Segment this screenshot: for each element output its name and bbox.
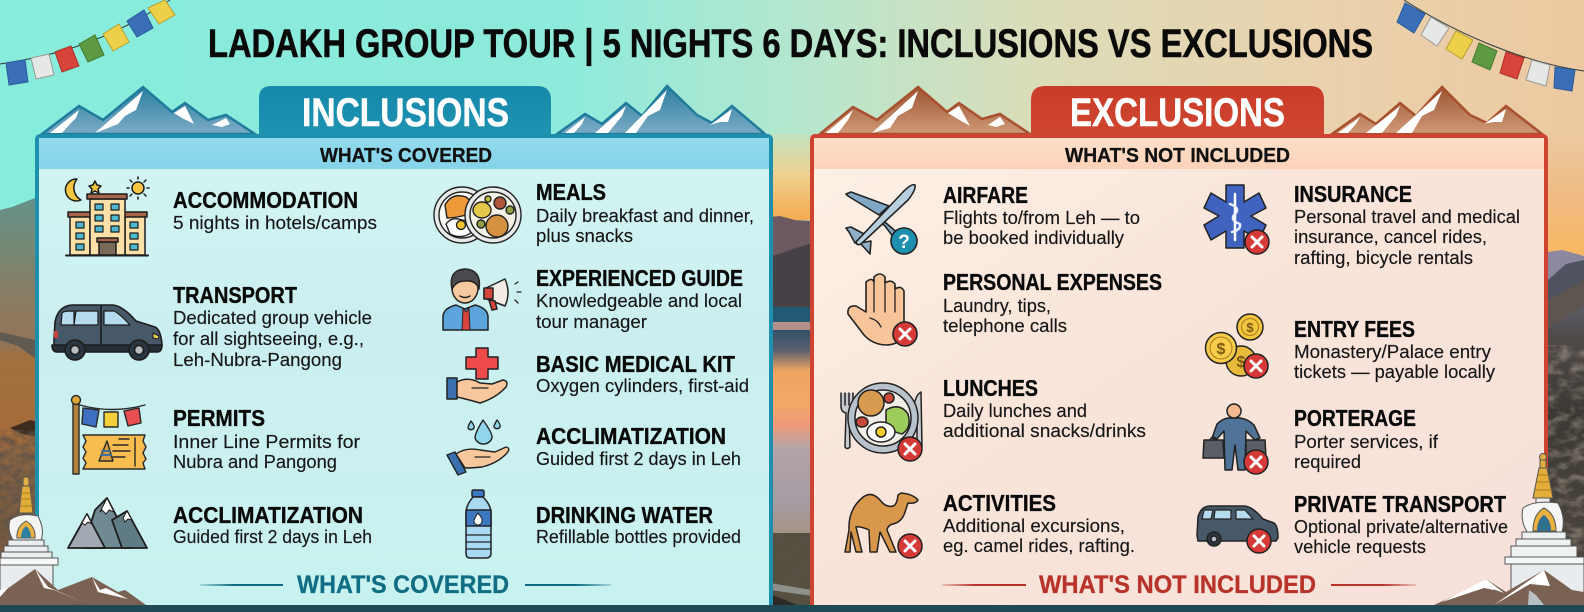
text: airfare: be booked individually <box>943 227 1125 248</box>
item: accommodation <box>65 177 377 256</box>
text: transport: Dedicated group vehicle <box>173 307 372 328</box>
text: accommodation <box>173 187 377 233</box>
item: insurance <box>1204 181 1520 268</box>
icon: plate with x badge <box>841 383 922 461</box>
text: insurance: INSURANCE <box>1294 181 1412 207</box>
footer label: what's covered: WHAT'S COVERED <box>297 571 509 599</box>
panel: inclusions <box>37 86 771 612</box>
panel body <box>812 136 1546 612</box>
tab: inclusions: INCLUSIONS <box>302 91 509 135</box>
tab: exclusions: EXCLUSIONS <box>1070 91 1285 135</box>
text: drinking water: DRINKING WATER <box>536 502 713 528</box>
prayer flags: left <box>0 0 175 85</box>
text: porterage: required <box>1294 451 1361 472</box>
icon: hotel <box>65 177 149 256</box>
icon: mountain peaks <box>68 498 147 548</box>
text: drinking water: Refillable bottles provided <box>536 526 741 547</box>
text: activities: Additional excursions, <box>943 515 1125 536</box>
item: drinking water <box>466 490 741 558</box>
panel: exclusions <box>812 86 1546 612</box>
bottom bar <box>0 605 1584 612</box>
text: permits <box>173 405 360 472</box>
mountains: behind inclusions panel <box>42 86 765 134</box>
text: lunches: Daily lunches and <box>943 400 1087 421</box>
text: insurance: insurance, cancel rides, <box>1294 226 1487 247</box>
panel subheading band <box>814 138 1544 169</box>
text: private transport: Optional private/alternative <box>1294 516 1508 537</box>
text: experienced guide: EXPERIENCED GUIDE <box>536 265 743 291</box>
text: basic medical kit: Oxygen cylinders, first-aid <box>536 375 749 396</box>
item: entry fees <box>1206 314 1496 382</box>
item: activities <box>845 490 1135 558</box>
text: acclimatization (left): Guided first 2 days in Leh <box>173 526 372 547</box>
text: porterage: Porter services, if <box>1294 431 1439 452</box>
icon: coins with x badge: $ <box>1237 354 1246 371</box>
text: experienced guide: tour manager <box>536 311 647 332</box>
text: acclimatization (right) <box>536 423 741 469</box>
text: private transport: PRIVATE TRANSPORT <box>1294 491 1506 517</box>
item: lunches <box>841 375 1146 461</box>
text: insurance: rafting, bicycle rentals <box>1294 247 1473 268</box>
text: acclimatization (right): ACCLIMATIZATION <box>536 423 726 449</box>
text: meals: MEALS <box>536 179 606 205</box>
item: porterage <box>1203 404 1439 474</box>
text: entry fees: ENTRY FEES <box>1294 316 1415 342</box>
stupa: bottom left <box>0 477 58 597</box>
text: entry fees: Monastery/Palace entry <box>1294 341 1492 362</box>
text: entry fees <box>1294 316 1496 382</box>
text: transport <box>173 282 372 370</box>
text: airfare: AIRFARE <box>943 182 1028 208</box>
item: permits <box>72 396 360 474</box>
icon: private car with x badge <box>1197 506 1278 553</box>
item: experienced guide <box>443 265 743 332</box>
icon: porter carrying bags with x badge <box>1203 404 1268 474</box>
text: activities: ACTIVITIES <box>943 490 1056 516</box>
item: basic medical kit <box>447 348 749 403</box>
text: airfare: Flights to/from Leh — to <box>943 207 1140 228</box>
text: personal expenses: telephone calls <box>943 315 1067 336</box>
text: entry fees: tickets — payable locally <box>1294 361 1496 382</box>
text: lunches <box>943 375 1146 441</box>
text: experienced guide <box>536 265 743 332</box>
text: permits: Nubra and Pangong <box>173 451 337 472</box>
icon: red cross over hand <box>447 348 507 403</box>
icon: flags and permit ticket <box>72 396 146 474</box>
text: accommodation: ACCOMMODATION <box>173 187 358 213</box>
text: acclimatization (left): ACCLIMATIZATION <box>173 502 363 528</box>
text: accommodation: 5 nights in hotels/camps <box>173 212 377 233</box>
icon: airplane with question badge <box>846 185 917 254</box>
text: activities <box>943 490 1135 556</box>
text: lunches: LUNCHES <box>943 375 1038 401</box>
footer label: what's not included: WHAT'S NOT INCLUDED <box>1039 571 1316 599</box>
stupa: bottom right <box>1505 454 1584 599</box>
text: porterage <box>1294 405 1439 472</box>
text: basic medical kit: BASIC MEDICAL KIT <box>536 351 735 377</box>
text: insurance: Personal travel and medical <box>1294 206 1520 227</box>
text: acclimatization (left) <box>173 502 372 547</box>
icon: stop hand with x badge <box>848 274 917 346</box>
text: lunches: additional snacks/drinks <box>943 420 1146 441</box>
text: transport: for all sightseeing, e.g., <box>173 328 364 349</box>
text: personal expenses <box>943 269 1162 336</box>
item: meals <box>434 179 754 246</box>
text: basic medical kit <box>536 351 749 396</box>
text: personal expenses: Laundry, tips, <box>943 295 1051 316</box>
icon: coins with x badge: $ <box>1217 341 1226 358</box>
icon: group vehicle <box>52 305 162 360</box>
mountains: bottom right <box>1434 570 1584 605</box>
text: permits: Inner Line Permits for <box>173 431 360 452</box>
mountains: bottom left <box>0 569 146 605</box>
panel subheading band <box>39 138 769 169</box>
icon: airplane with question badge: ? <box>898 232 910 253</box>
panel subheading band: WHAT'S COVERED <box>320 145 492 167</box>
text: experienced guide: Knowledgeable and local <box>536 290 742 311</box>
text: meals: Daily breakfast and dinner, <box>536 205 754 226</box>
text: porterage: PORTERAGE <box>1294 405 1416 431</box>
panel body <box>37 136 771 612</box>
item: acclimatization (right) <box>447 420 741 475</box>
icon: camel with x badge <box>845 493 922 558</box>
icon: two plates of food <box>434 187 521 243</box>
item: private transport <box>1197 491 1508 557</box>
icon: water drops over hand <box>447 420 509 475</box>
text: meals: plus snacks <box>536 225 633 246</box>
text: drinking water <box>536 502 741 547</box>
mountains: behind exclusions panel <box>820 87 1542 134</box>
icon: coins with x badge: $ <box>1246 320 1254 335</box>
text: permits: PERMITS <box>173 405 265 431</box>
item: airfare <box>846 182 1140 254</box>
text: acclimatization (right): Guided first 2 days in Leh <box>536 448 741 469</box>
text: transport: TRANSPORT <box>173 282 297 308</box>
text: meals <box>536 179 754 246</box>
text: private transport: vehicle requests <box>1294 536 1426 557</box>
item: personal expenses <box>848 269 1162 346</box>
text: airfare <box>943 182 1140 248</box>
text: private transport <box>1294 491 1508 557</box>
item: transport <box>52 282 372 370</box>
text: activities: eg. camel rides, rafting. <box>943 535 1135 556</box>
panel subheading band: WHAT'S NOT INCLUDED <box>1065 145 1290 167</box>
icon: guide with megaphone <box>443 269 521 330</box>
text: personal expenses: PERSONAL EXPENSES <box>943 269 1162 295</box>
icon: star of life with x badge <box>1204 185 1269 254</box>
icon: water bottle <box>466 490 491 558</box>
text: transport: Leh-Nubra-Pangong <box>173 349 342 370</box>
prayer flags: right <box>1397 0 1584 91</box>
text: insurance <box>1294 181 1520 268</box>
item: acclimatization (left) <box>68 498 372 548</box>
icon: coins with x badge <box>1206 314 1268 378</box>
